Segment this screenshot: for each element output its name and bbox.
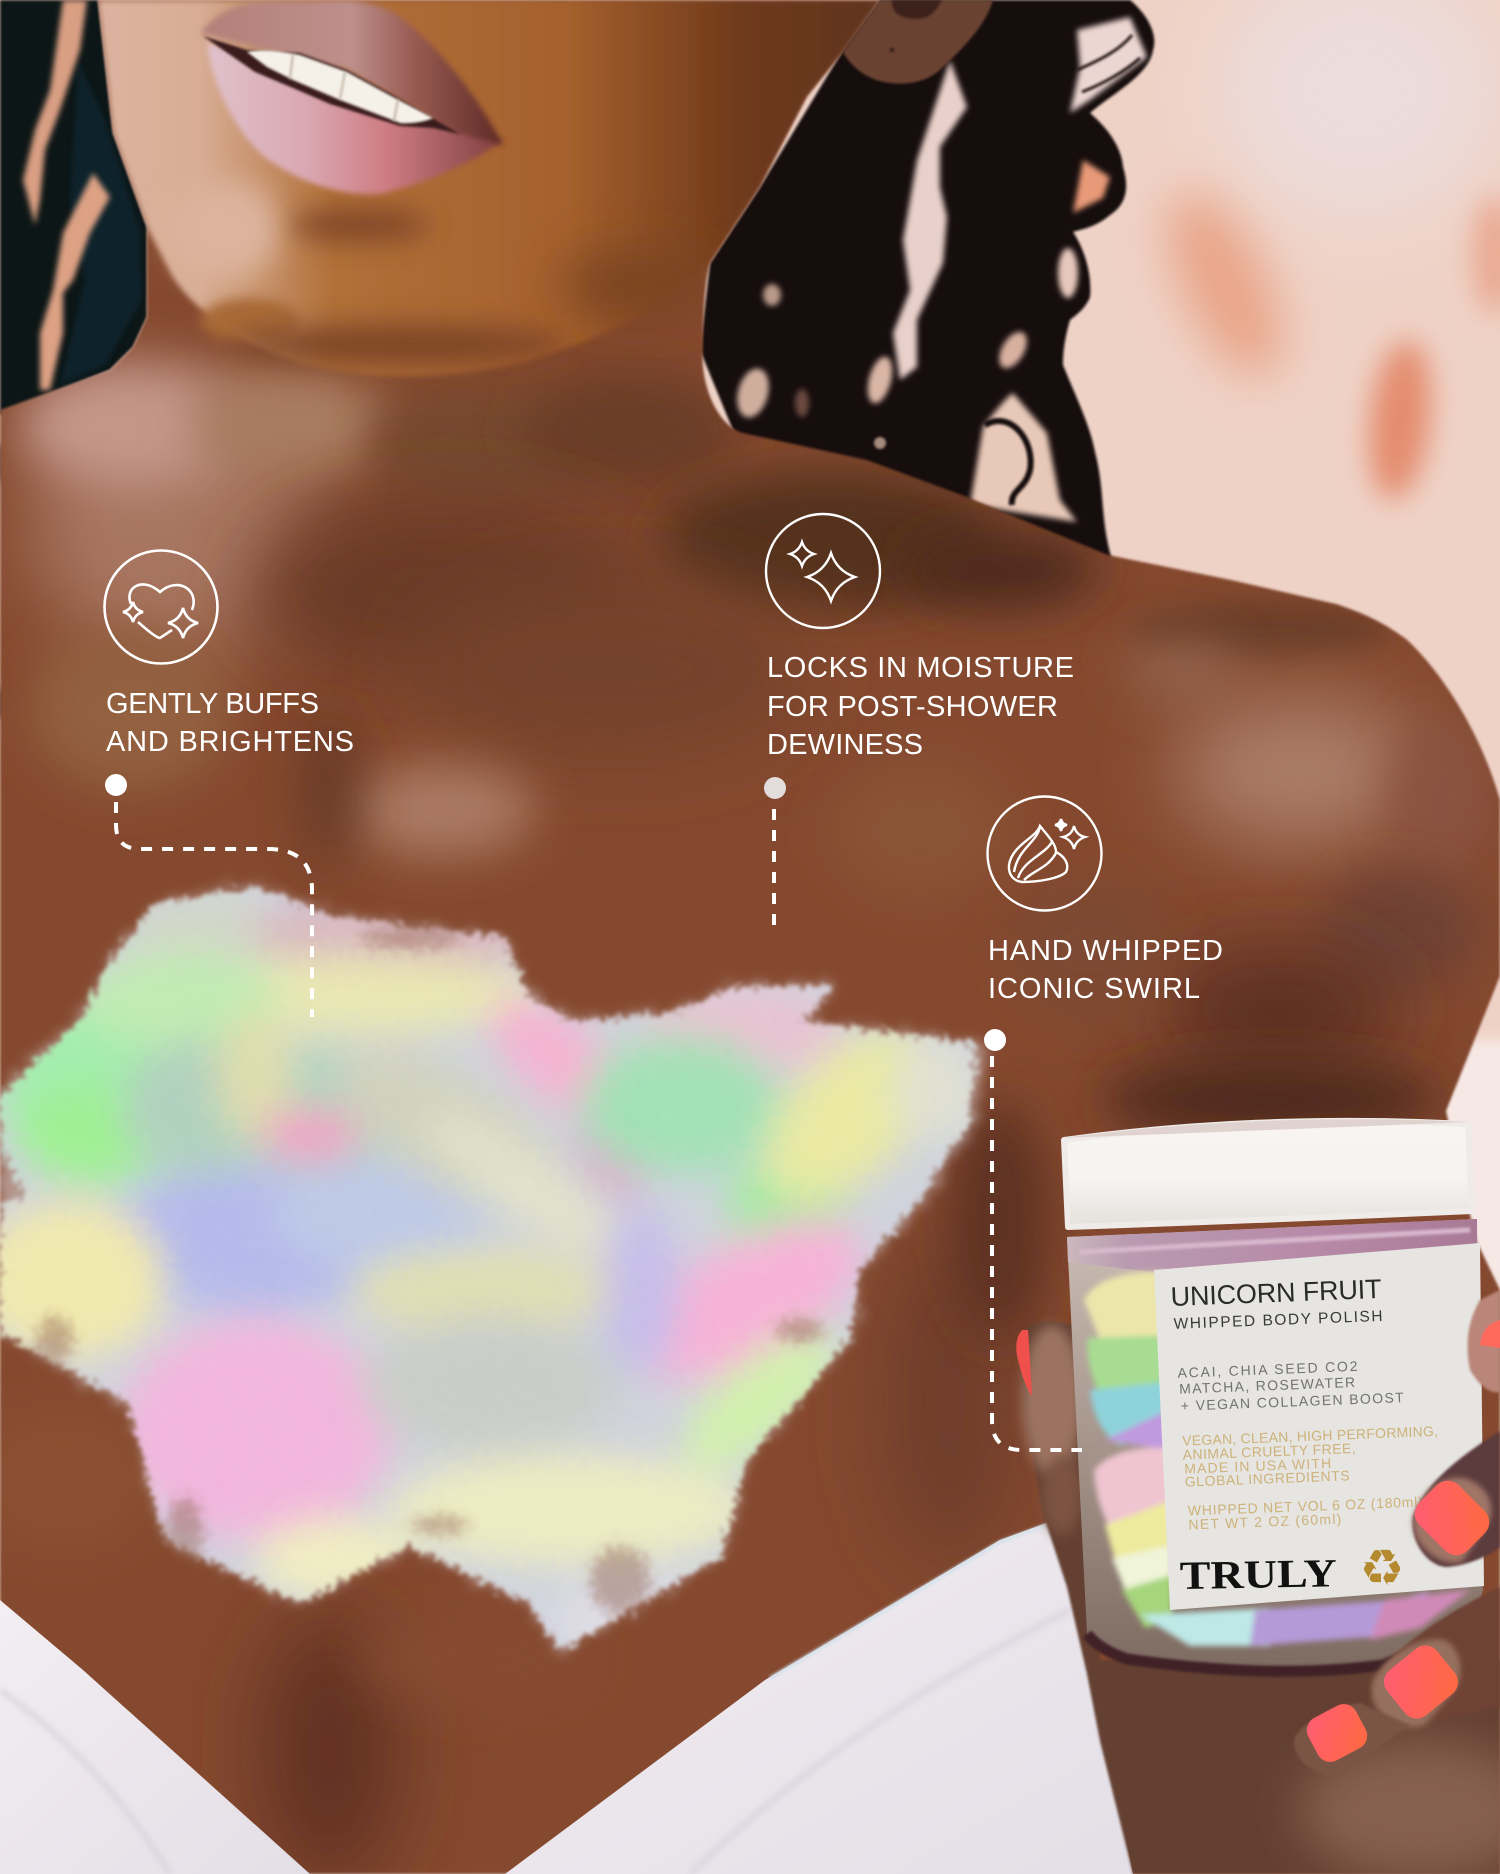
face and chin	[98, 0, 880, 376]
middle finger	[1408, 1431, 1500, 1567]
caption	[106, 688, 354, 758]
jar rim tint	[1067, 1219, 1477, 1272]
dotted leader	[105, 774, 312, 1017]
fingers and coral nails	[1294, 1290, 1500, 1777]
icon: whipped swirl with sparkles	[988, 796, 1102, 910]
label text: + VEGAN COLLAGEN BOOST	[1181, 1389, 1404, 1414]
top finger	[1468, 1290, 1500, 1392]
little finger	[1294, 1699, 1410, 1777]
label text: VEGAN, CLEAN, HIGH PERFORMING,	[1182, 1423, 1438, 1449]
label text: MADE IN USA WITH	[1184, 1455, 1331, 1477]
label text: WHIPPED NET VOL 6 OZ (180ml)	[1188, 1493, 1423, 1518]
callout: hand whipped iconic swirl	[984, 796, 1223, 1450]
caption: GENTLY BUFFS	[106, 688, 319, 720]
callout: locks in moisture	[764, 514, 1074, 928]
caption: FOR POST-SHOWER	[767, 691, 1058, 723]
jar glass body	[1067, 1219, 1483, 1672]
jar lid	[1064, 1121, 1472, 1227]
lips and teeth	[200, 0, 503, 194]
icon: heart with sparkles	[104, 550, 218, 664]
label text: ANIMAL CRUELTY FREE,	[1182, 1440, 1356, 1463]
jar label	[1154, 1243, 1484, 1610]
icon: two sparkles	[766, 514, 880, 628]
caption: AND BRIGHTENS	[106, 726, 354, 758]
label text: GLOBAL INGREDIENTS	[1184, 1467, 1350, 1490]
product jar	[1062, 1119, 1484, 1672]
hair: left strands	[0, 0, 147, 415]
jar bottom rim	[1087, 1634, 1440, 1671]
callout: gently buffs and brightens	[104, 550, 354, 1017]
iridescent body polish smear	[0, 877, 994, 1660]
label text: ACAI, CHIA SEED CO2	[1177, 1358, 1358, 1381]
whipped swirl	[1084, 1272, 1470, 1646]
label text: TRULY	[1179, 1550, 1337, 1598]
label text: WHIPPED BODY POLISH	[1173, 1308, 1383, 1333]
caption	[988, 935, 1223, 1005]
caption	[767, 652, 1074, 761]
label text: NET WT 2 OZ (60ml)	[1188, 1511, 1342, 1532]
label text: MATCHA, ROSEWATER	[1179, 1374, 1355, 1397]
dotted leader	[984, 1029, 1082, 1450]
label text	[1170, 1272, 1442, 1598]
caption: ICONIC SWIRL	[988, 973, 1200, 1005]
caption: HAND WHIPPED	[988, 935, 1223, 967]
caption: LOCKS IN MOISTURE	[767, 652, 1074, 684]
hand holding the jar	[1016, 1321, 1500, 1874]
ear	[843, 0, 993, 84]
hair: left braid on shoulder	[0, 443, 91, 718]
hair: right curls	[700, 0, 1154, 560]
recycle symbol: ♻	[1360, 1539, 1404, 1597]
ring finger	[1372, 1587, 1500, 1727]
white wrap top	[0, 1518, 1133, 1874]
smear outer fringe	[0, 886, 985, 1650]
dotted leader	[764, 777, 786, 928]
caption: DEWINESS	[767, 729, 923, 761]
label text: UNICORN FRUIT	[1170, 1274, 1382, 1312]
